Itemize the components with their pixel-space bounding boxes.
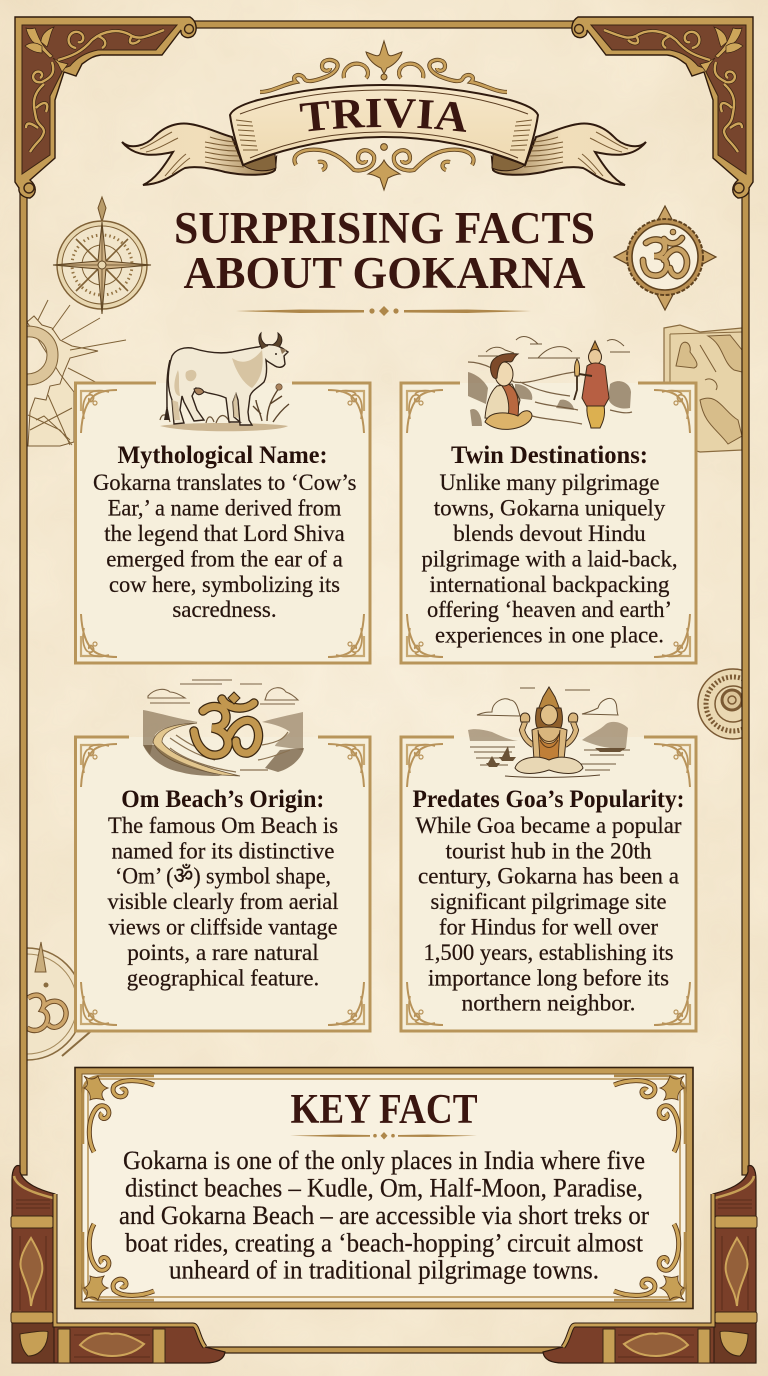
frame: top-right corner xyxy=(572,17,753,198)
card heading: Predates Goa’s Popularity: xyxy=(412,786,684,813)
decorative medallion, right xyxy=(697,668,742,740)
card body text: While Goa became a popular xyxy=(416,813,682,839)
panel: predates goa popularity xyxy=(401,687,696,1031)
card body text: emerged from the ear of a xyxy=(106,546,343,572)
panel: mythological name xyxy=(75,333,370,663)
card body text: Gokarna translates to ‘Cow’s xyxy=(93,470,356,496)
key fact frame xyxy=(75,1068,693,1308)
decorative om medallion, left xyxy=(28,942,91,1061)
card heading: Om Beach’s Origin: xyxy=(121,786,324,813)
card body text: sacredness. xyxy=(172,597,277,623)
card body text: the legend that Lord Shiva xyxy=(104,521,345,547)
ribbon: trivia label: TRIVIA xyxy=(300,98,466,132)
decorative map sketch: old map, right xyxy=(664,325,742,452)
card body text xyxy=(422,470,678,649)
icon: cow xyxy=(160,333,289,431)
icon: om over beach xyxy=(143,680,304,776)
panel: twin destinations xyxy=(401,337,696,663)
title divider xyxy=(236,306,531,316)
key fact heading: KEY FACT xyxy=(290,1087,478,1133)
frame: right rail xyxy=(742,190,749,1175)
panel: key fact xyxy=(75,1068,693,1308)
key fact text: distinct beaches – Kudle, Om, Half-Moon, Paradise, xyxy=(125,1172,643,1202)
ribbon: left tail xyxy=(122,124,276,185)
deity figure xyxy=(538,687,560,710)
card body text xyxy=(93,470,356,623)
filigree below ribbon xyxy=(294,144,474,190)
card body text: importance long before its xyxy=(428,965,669,991)
card body text: century, Gokarna has been a xyxy=(418,864,680,890)
frame: top-left corner xyxy=(15,17,196,198)
title: SURPRISING FACTS xyxy=(174,203,595,253)
frame: left rail xyxy=(20,190,27,1175)
card body text: cow here, symbolizing its xyxy=(109,572,340,598)
filigree above ribbon xyxy=(260,41,507,92)
key fact text: and Gokarna Beach – are accessible via short treks or xyxy=(119,1200,649,1230)
key fact text xyxy=(119,1145,649,1285)
card body text: international backpacking xyxy=(430,572,670,598)
card body text: significant pilgrimage site xyxy=(430,889,666,915)
ribbon: centre band xyxy=(230,85,538,165)
key fact text: unheard of in traditional pilgrimage towns. xyxy=(169,1255,599,1285)
frame: bottom bar xyxy=(203,1347,565,1353)
book corner, bottom right xyxy=(543,1166,757,1363)
trivia ribbon banner xyxy=(121,84,647,186)
title xyxy=(174,203,595,298)
card body text: points, a rare natural xyxy=(127,940,319,966)
title: ABOUT GOKARNA xyxy=(184,248,586,298)
frame: top bar xyxy=(190,21,580,28)
card heading: Mythological Name: xyxy=(118,442,328,469)
key fact text: Gokarna is one of the only places in India where five xyxy=(123,1145,645,1175)
card body text: 1,500 years, establishing its xyxy=(424,940,674,966)
card body text: tourist hub in the 20th xyxy=(446,838,652,864)
ribbon: right tail xyxy=(492,124,646,185)
icon: pilgrim and backpacker scene xyxy=(468,337,632,429)
card body text: The famous Om Beach is xyxy=(108,813,338,839)
card body text: pilgrimage with a laid-back, xyxy=(422,546,678,572)
ribbon: fold shadows xyxy=(243,154,525,171)
key fact divider xyxy=(290,1132,477,1140)
icon: om symbol xyxy=(643,229,687,276)
card body text: geographical feature. xyxy=(127,965,319,991)
om symbol xyxy=(194,692,259,755)
card body text: visible clearly from aerial xyxy=(108,889,339,915)
standing figure xyxy=(590,341,600,352)
card body text: ‘Om’ (ॐ) symbol shape, xyxy=(115,864,331,890)
card heading: Twin Destinations: xyxy=(451,442,648,469)
card body text: named for its distinctive xyxy=(112,838,334,864)
card body text: for Hindus for well over xyxy=(439,914,658,940)
card background xyxy=(75,383,370,663)
card body text: views or cliffside vantage xyxy=(108,914,338,940)
icon: seated deity xyxy=(468,687,630,777)
seated figure xyxy=(485,384,520,420)
card body text: offering ‘heaven and earth’ xyxy=(427,597,672,623)
card body text: blends devout Hindu xyxy=(453,521,646,547)
book corner, bottom left xyxy=(11,1166,225,1363)
card body text xyxy=(416,813,682,1017)
card body text: Unlike many pilgrimage xyxy=(440,470,660,496)
card body text: towns, Gokarna uniquely xyxy=(434,496,666,522)
key fact text: boat rides, creating a ‘beach-hopping’ circuit almost xyxy=(125,1227,644,1257)
card body text: experiences in one place. xyxy=(435,623,664,649)
icon: compass rose xyxy=(53,197,151,314)
card body text: Ear,’ a name derived from xyxy=(108,496,341,522)
card body text xyxy=(108,813,339,991)
icon: om medallion xyxy=(614,206,716,310)
card body text: northern neighbor. xyxy=(462,991,636,1017)
panel: om beach origin xyxy=(75,680,370,1031)
decorative map sketch: sun and coast, left xyxy=(27,300,126,446)
